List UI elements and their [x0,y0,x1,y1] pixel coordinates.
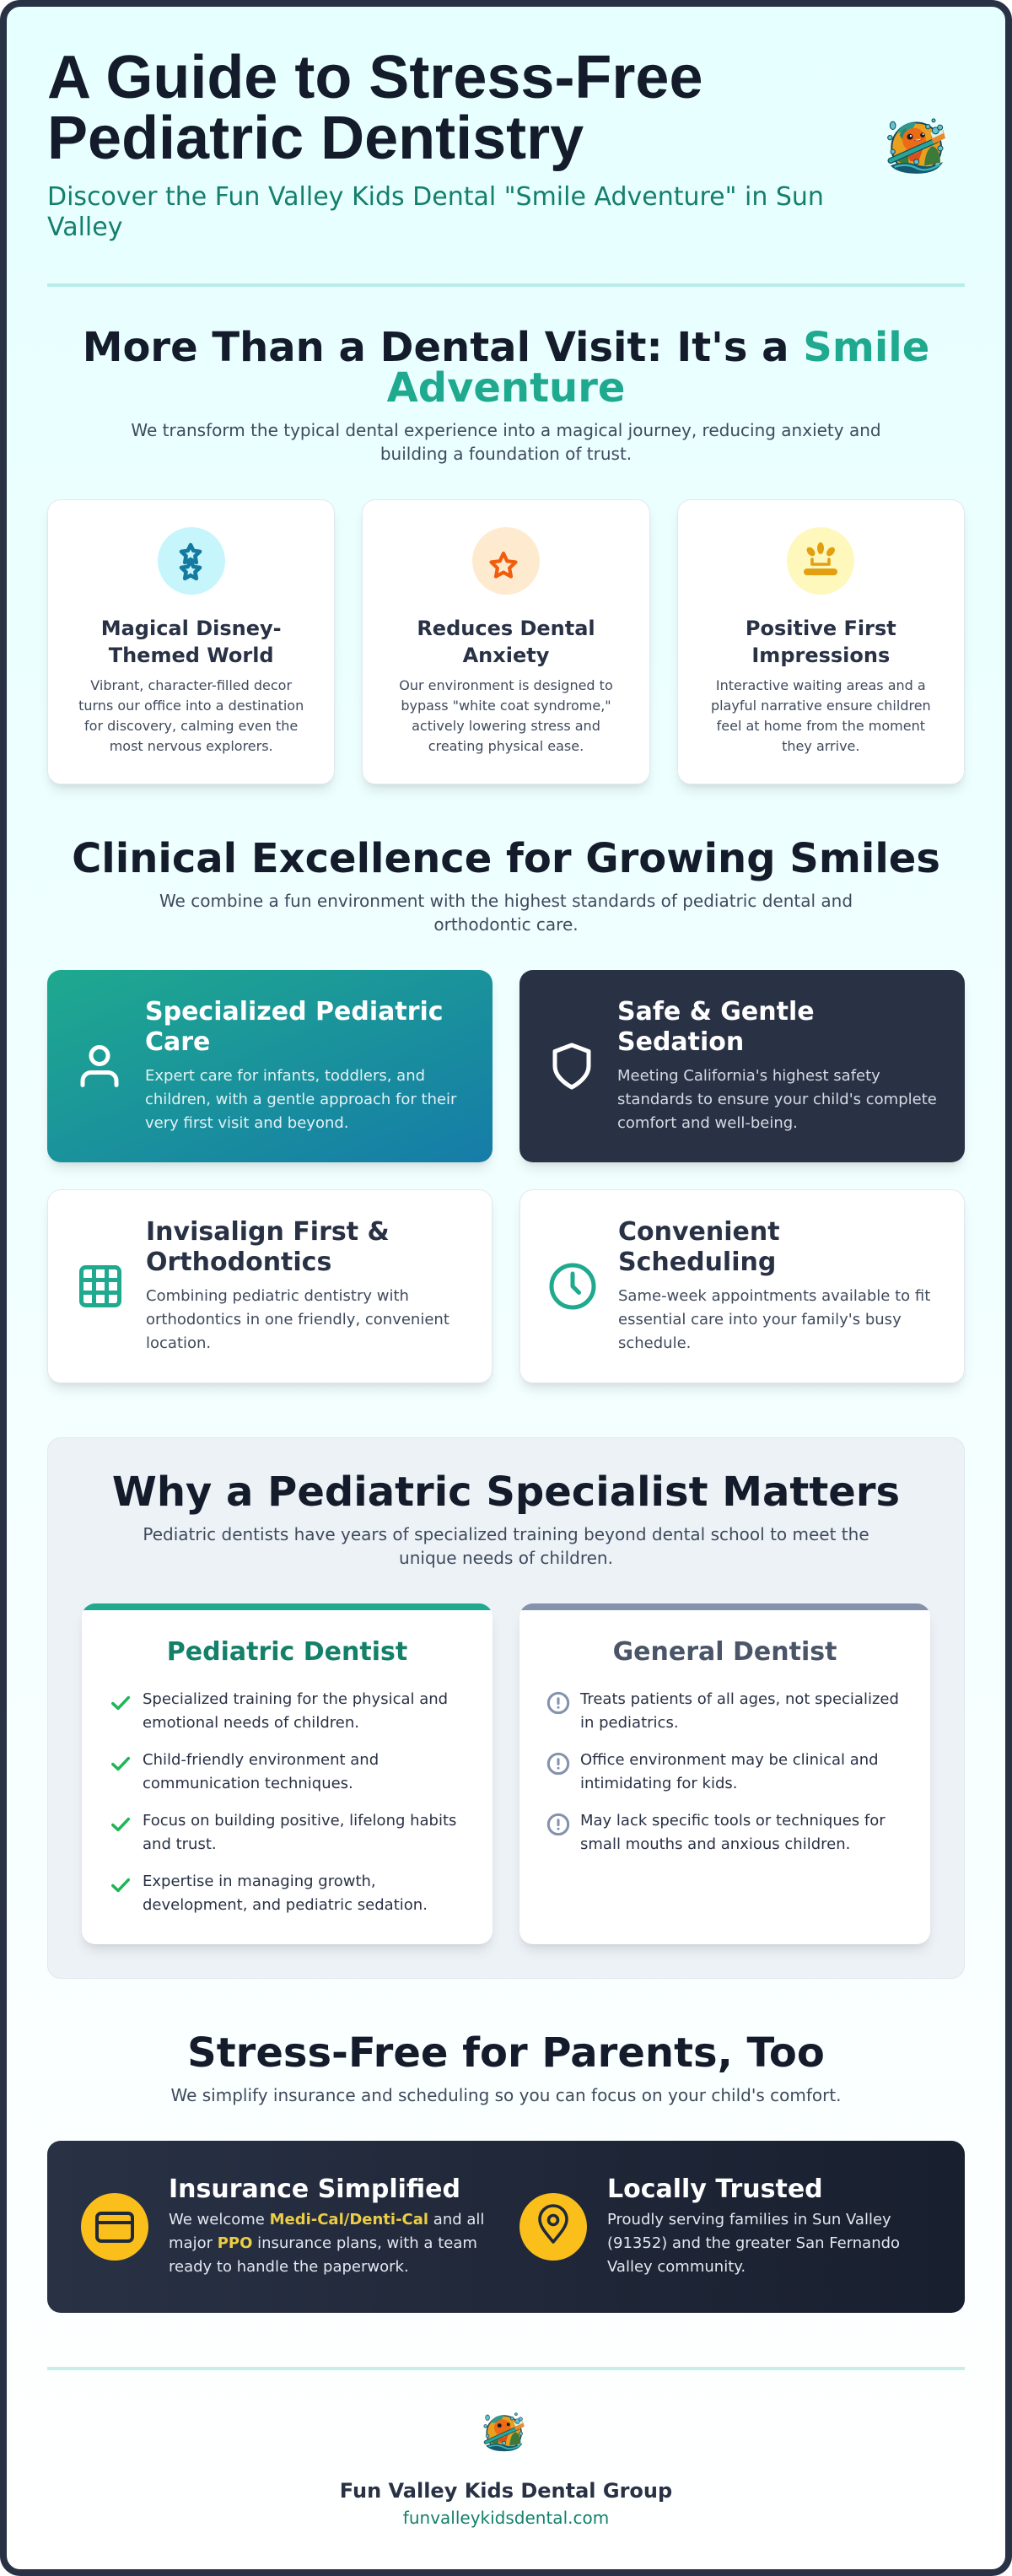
list item [580,1690,899,1732]
card title [101,617,282,667]
card text [145,1067,457,1132]
icon: crown paw [787,527,854,595]
location text: Valley community. [607,2258,746,2276]
list item: Specialized training for the physical and [143,1690,448,1708]
card title: Convenient [618,1217,780,1247]
heading: more than a dental visit: Adventure [387,364,625,412]
card text: most nervous explorers. [110,738,273,754]
icon: grid [79,1265,121,1307]
card title: Anxiety [463,644,549,667]
location text [607,2208,900,2279]
subtitle: Valley [47,213,122,242]
footer link: funvalleykidsdental.com [403,2508,609,2528]
card title [746,617,896,667]
clinical intro text: orthodontic care. [433,914,579,935]
comparison: general dentist [519,1603,930,1944]
card text: Our environment is designed to [399,677,613,693]
card text: playful narrative ensure children [711,698,931,714]
card title: Themed World [109,644,274,667]
column title: General Dentist [613,1637,837,1667]
icon: map pin [519,2193,587,2261]
insurance text: We welcome Medi-Cal/Denti-Cal and all [169,2211,484,2228]
footer logo [482,2411,526,2453]
card text: comfort and well-being. [617,1114,798,1132]
list item: Focus on building positive, lifelong habits [143,1812,456,1830]
intro text [131,420,881,464]
card text [617,1067,937,1132]
icon: clock [550,1264,595,1309]
list item: and trust. [143,1835,217,1853]
clinical intro text [159,891,853,935]
intro text: We transform the typical dental experience into a magical journey, reducing anxiety and [131,420,881,440]
why intro text [143,1524,869,1568]
panel: reduces anxiety [362,499,650,784]
icon: alert [546,1753,570,1775]
card text: feel at home from the moment [717,718,925,734]
heading: why a specialist: Why a Pediatric Specialist Matters [112,1469,900,1516]
clinical intro text: We combine a fun environment with the highest standards of pediatric dental and [159,891,853,911]
list item: Treats patients of all ages, not specialized [580,1690,899,1708]
location text: (91352) and the greater San Fernando [607,2234,900,2252]
card text [78,677,304,754]
icon: star [472,527,540,595]
list item: communication techniques. [143,1775,353,1792]
list item: May lack specific tools or techniques for [580,1812,886,1830]
card text: Combining pediatric dentistry with [146,1287,409,1305]
list item [143,1751,379,1792]
card title: Scheduling [618,1248,776,1277]
card text: schedule. [618,1334,691,1352]
card text [399,677,613,754]
list item: small mouths and anxious children. [580,1835,850,1853]
card title: Positive First [746,617,896,640]
card title: Sedation [617,1027,744,1057]
card text: actively lowering stress and [412,718,600,734]
card text: creating physical ease. [428,738,584,754]
icon: shield [553,1043,590,1090]
insurance title: Insurance Simplified [169,2175,460,2204]
insurance text [169,2211,484,2276]
card text: they arrive. [782,738,859,754]
list item: development, and pediatric sedation. [143,1896,428,1914]
heading: stress-free for parents: Stress-Free for Parents, Too [187,2029,825,2077]
icon: credit card [81,2193,148,2261]
title [47,44,703,172]
list item [143,1873,428,1914]
insurance text: ready to handle the paperwork. [169,2258,409,2276]
title: Pediatric Dentistry [47,105,584,172]
icon: check [111,1695,130,1711]
card title: Magical Disney- [101,617,282,640]
card text: very first visit and beyond. [145,1114,349,1132]
list item: emotional needs of children. [143,1714,359,1732]
icon: person [81,1045,118,1087]
card text [146,1287,449,1352]
footer name: Fun Valley Kids Dental Group [340,2479,672,2503]
panel: scheduling [519,1189,965,1383]
card title: Invisalign First & [146,1217,390,1247]
card title [417,617,595,667]
logo: fish with toothbrush [887,118,945,174]
list item [580,1812,886,1853]
card text: Expert care for infants, toddlers, and [145,1067,425,1085]
panel: magical world [47,499,335,784]
why intro text: unique needs of children. [399,1548,613,1568]
card text: standards to ensure your child's complete [617,1091,937,1108]
location title: Locally Trusted [607,2175,823,2204]
heading: more than a dental visit [83,324,929,412]
icon: alert [546,1813,570,1835]
icon: check [111,1756,130,1771]
card text: bypass "white coat syndrome," [401,698,611,714]
icon: check [111,1878,130,1893]
comparison: pediatric dentist [82,1603,493,1944]
card title: Reduces Dental [417,617,595,640]
card text [618,1287,930,1352]
card text: essential care into your family's busy [618,1311,902,1328]
card title: Impressions [751,644,890,667]
card title [145,997,444,1057]
card title: Orthodontics [146,1248,331,1277]
location text: Proudly serving families in Sun Valley [607,2211,891,2228]
card title: Safe & Gentle [617,997,815,1027]
panel: specialized care [47,970,493,1162]
heading: more than a dental visit: More Than a Dental Visit: It's a Smile [83,324,929,371]
card text: for discovery, calming even the [84,718,298,734]
list item: in pediatrics. [580,1714,679,1732]
list item: Child-friendly environment and [143,1751,379,1769]
card title [618,1217,780,1277]
icon: check [111,1817,130,1832]
list item: Expertise in managing growth, [143,1873,376,1890]
subtitle [47,182,824,242]
card title [146,1217,390,1277]
list item [143,1690,448,1732]
why intro text: Pediatric dentists have years of specialized training beyond dental school to meet the [143,1524,869,1544]
list item [143,1812,456,1853]
card text: location. [146,1334,211,1352]
panel: invisalign [47,1189,493,1383]
card text: Interactive waiting areas and a [716,677,926,693]
title: A Guide to Stress-Free [47,44,703,111]
panel: first impressions [677,499,965,784]
card text: children, with a gentle approach for their [145,1091,456,1108]
list item [580,1751,879,1792]
insurance text: major PPO insurance plans, with a team [169,2234,477,2252]
card text: Meeting California's highest safety [617,1067,880,1085]
icon: stars [158,527,225,595]
column title: Pediatric Dentist [167,1637,407,1667]
panel: insurance and location [47,2141,965,2313]
list item: intimidating for kids. [580,1775,737,1792]
card text: orthodontics in one friendly, convenient [146,1311,449,1328]
heading: clinical excellence: Clinical Excellence for Growing Smiles [72,835,940,882]
card text: Vibrant, character-filled decor [90,677,292,693]
icon: alert [546,1692,570,1714]
card title: Care [145,1027,210,1057]
card text: turns our office into a destination [78,698,304,714]
parents intro text: We simplify insurance and scheduling so you can focus on your child's comfort. [170,2085,842,2105]
card title [617,997,815,1057]
card text: Same-week appointments available to fit [618,1287,930,1305]
panel: sedation [519,970,965,1162]
list item: Office environment may be clinical and [580,1751,879,1769]
subtitle: Discover the Fun Valley Kids Dental "Smile Adventure" in Sun [47,182,824,212]
card text [711,677,931,754]
panel: why a specialist matters [47,1437,965,1979]
intro text: building a foundation of trust. [380,444,632,464]
card title: Specialized Pediatric [145,997,444,1027]
